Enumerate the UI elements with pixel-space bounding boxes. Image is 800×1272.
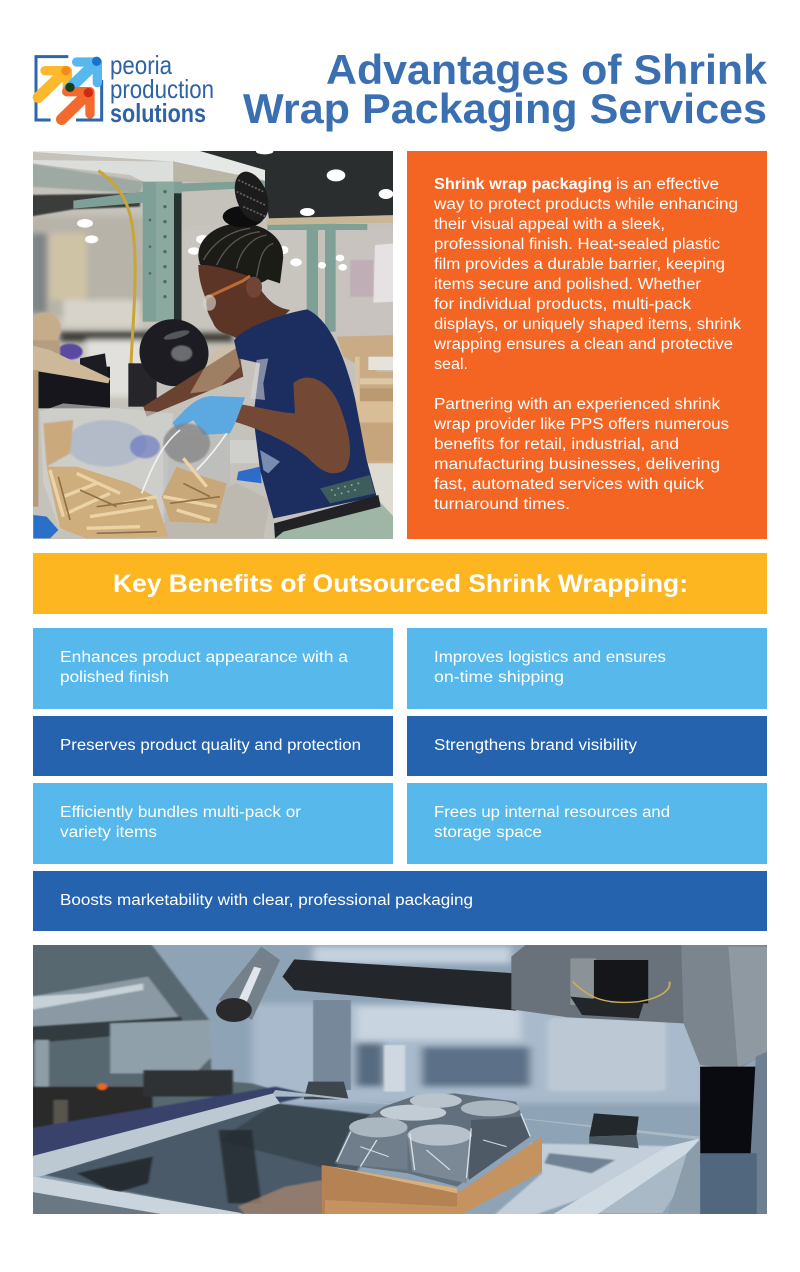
benefit: product appearance: polished finish xyxy=(60,669,169,686)
first paragraph: items secure and polished. Whether xyxy=(434,276,701,293)
first paragraph: their visual appeal with a sleek, xyxy=(434,216,665,233)
second paragraph xyxy=(433,396,729,513)
desk fan xyxy=(128,319,208,407)
bags of wood pieces xyxy=(33,403,262,538)
second paragraph: benefits for retail, industrial, and xyxy=(434,436,679,453)
benefit: resources: storage space xyxy=(434,824,542,841)
logo wordmark: solutions xyxy=(110,98,206,128)
cardboard tray xyxy=(322,1137,542,1217)
benefit: bundles: Efficiently bundles multi-pack or xyxy=(60,804,301,821)
ceiling lights xyxy=(77,149,393,271)
motor housing xyxy=(511,945,684,1023)
heading band: key benefits xyxy=(33,553,767,614)
glass surface xyxy=(44,1103,389,1217)
benefit: logistics: Improves logistics and ensures xyxy=(434,649,666,666)
front frame rails xyxy=(30,1093,280,1177)
first paragraph: is an effective xyxy=(616,176,719,193)
blue glove xyxy=(173,396,245,435)
benefit: marketability: Boosts marketability with clear, professional packaging xyxy=(60,892,473,909)
post and base xyxy=(313,1000,351,1090)
table right surface xyxy=(494,1142,670,1214)
first paragraph: way to protect products while enhancing xyxy=(433,196,738,213)
benefit: resources: Frees up internal resources and xyxy=(434,804,670,821)
heading band: key benefits: Key Benefits of Outsourced Shrink Wrapping: xyxy=(113,570,688,598)
worker far arm xyxy=(143,347,243,417)
first paragraph: displays, or uniquely shaped items, shrink xyxy=(434,316,741,333)
title xyxy=(243,46,768,132)
benefit: brand visibility: Strengthens brand visibility xyxy=(434,737,637,754)
logo wordmark xyxy=(110,50,214,128)
benefit: bundles: variety items xyxy=(60,824,157,841)
logo icon: frame and arrows xyxy=(36,57,102,120)
benefit: quality xyxy=(33,716,393,776)
dark cabinet xyxy=(700,1067,757,1163)
shrink wrapped jars xyxy=(334,1093,530,1187)
left machinery xyxy=(30,940,313,1160)
first paragraph: wrapping ensures a clean and protective xyxy=(433,336,733,353)
background person xyxy=(29,312,83,360)
ceiling xyxy=(173,151,393,218)
benefit: logistics: on-time shipping xyxy=(434,669,564,686)
benefit: logistics xyxy=(407,628,767,709)
shelving posts xyxy=(73,181,367,332)
benefit: marketability xyxy=(33,871,767,931)
title: Advantages of Shrink xyxy=(326,46,768,93)
photo: worker packing wooden pieces into bags xyxy=(29,149,397,540)
benefit: bundles xyxy=(33,783,393,864)
right housing xyxy=(681,945,771,1069)
worker hair xyxy=(198,167,283,287)
title: Wrap Packaging Services xyxy=(243,85,767,132)
first paragraph: seal. xyxy=(434,356,468,373)
logo wordmark: production xyxy=(110,74,214,104)
benefit: brand visibility xyxy=(407,716,767,776)
second paragraph: fast, automated services with quick xyxy=(434,476,704,493)
benefit: product appearance: Enhances product appearance with a xyxy=(60,649,348,666)
worker face and neck xyxy=(198,265,290,338)
first paragraph: for individual products, multi-pack xyxy=(434,296,691,313)
second paragraph: Partnering with an experienced shrink xyxy=(434,396,720,413)
first paragraph: Shrink wrap packaging xyxy=(434,176,612,193)
benefit: resources xyxy=(407,783,767,864)
machine table frame xyxy=(271,1090,700,1213)
first paragraph: film provides a durable barrier, keeping xyxy=(434,256,725,273)
benefit: product appearance xyxy=(33,628,393,709)
first paragraph: professional finish. Heat-sealed plastic xyxy=(434,236,720,253)
yellow cable xyxy=(98,171,135,367)
second paragraph: wrap provider like PPS offers numerous xyxy=(433,416,729,433)
work table xyxy=(125,484,269,538)
logo xyxy=(36,50,214,128)
photo: shrink wrapped jars on machine xyxy=(30,940,771,1217)
panel: intro text xyxy=(407,151,767,539)
first paragraph xyxy=(433,176,741,373)
logo wordmark: peoria xyxy=(110,50,172,80)
black roller xyxy=(282,959,516,1011)
second paragraph: manufacturing businesses, delivering xyxy=(434,456,720,473)
cardboard flap and dark box xyxy=(38,367,110,408)
benefit: quality: Preserves product quality and protection xyxy=(60,737,361,754)
worker shirt xyxy=(234,309,377,518)
black clip xyxy=(589,1113,639,1137)
wall sign xyxy=(373,243,395,303)
worker near arm xyxy=(234,377,350,473)
silver cylinder xyxy=(219,947,280,1020)
trousers and belt xyxy=(275,500,397,540)
right cardboard boxes xyxy=(337,335,397,517)
second paragraph: turnaround times. xyxy=(434,496,570,513)
